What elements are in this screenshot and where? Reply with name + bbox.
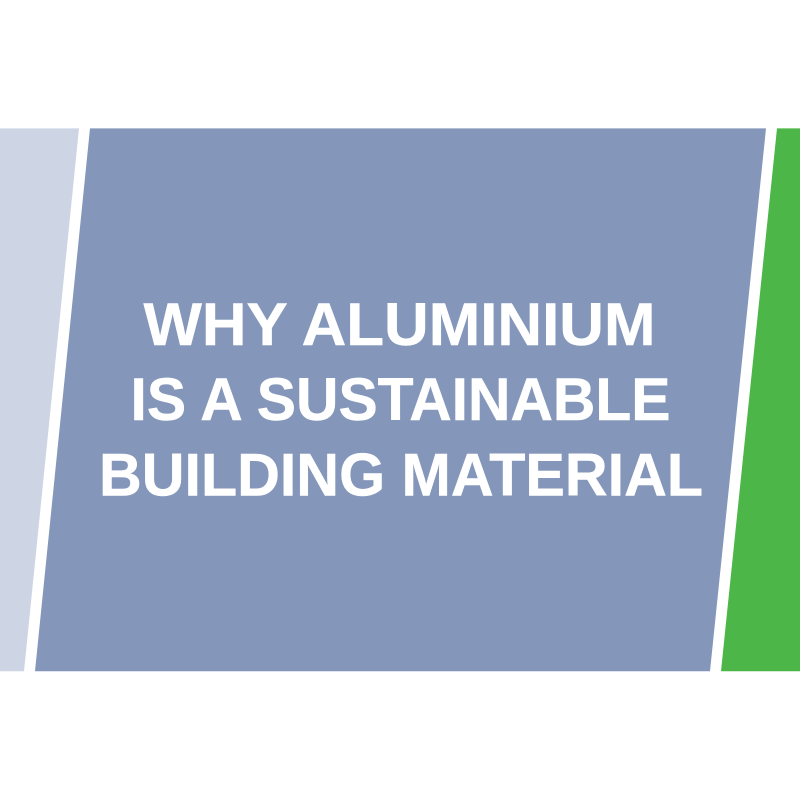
panel: left pale blue band bbox=[0, 128, 79, 671]
title: BUILDING MATERIAL bbox=[99, 442, 703, 508]
title: WHY ALUMINIUM bbox=[144, 291, 656, 358]
panel: right green band bbox=[721, 128, 800, 671]
panel: central blue band bbox=[35, 128, 766, 671]
title: IS A SUSTAINABLE bbox=[130, 366, 670, 433]
title bbox=[99, 291, 703, 508]
